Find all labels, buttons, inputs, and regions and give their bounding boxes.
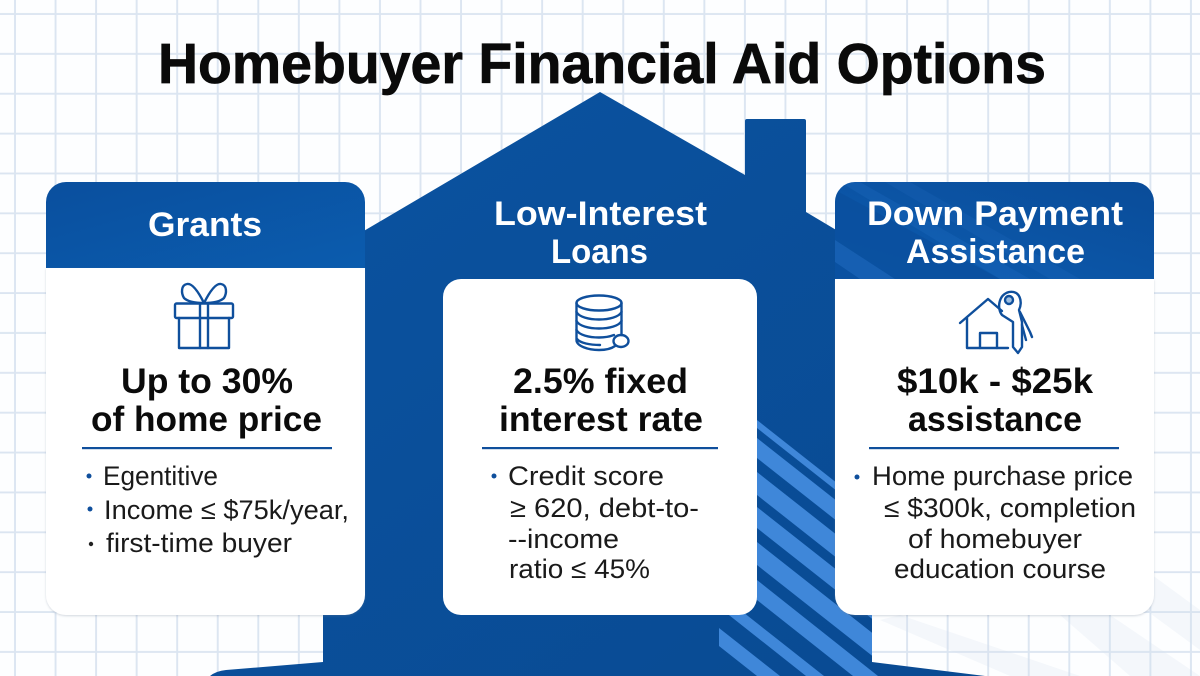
key figure: 2.5 percent fixed rate: interest rate bbox=[499, 400, 703, 439]
key figure: up to 30 percent bbox=[91, 362, 322, 439]
eligibility list: loans: ratio ≤ 45% bbox=[509, 554, 650, 584]
eligibility list: loans bbox=[492, 461, 699, 584]
key figure: up to 30 percent: Up to 30% bbox=[121, 362, 293, 401]
panel: down payment assistance bbox=[835, 182, 1154, 615]
key figure: 10k to 25k: assistance bbox=[908, 400, 1082, 439]
eligibility list: down payment bbox=[854, 461, 1136, 584]
key figure: 10k to 25k: $10k - $25k bbox=[897, 362, 1094, 401]
icon: coin stack bbox=[576, 296, 628, 350]
heading: grants: Grants bbox=[148, 206, 262, 244]
eligibility list: grants: first-time buyer bbox=[106, 528, 292, 558]
key figure: 10k to 25k bbox=[897, 362, 1094, 439]
eligibility list: down payment: of homebuyer bbox=[908, 524, 1082, 554]
heading: down payment assistance: Down Payment bbox=[867, 195, 1123, 233]
eligibility list: loans: --income bbox=[508, 524, 619, 554]
icon: gift box bbox=[175, 284, 233, 348]
eligibility list: loans: Credit score bbox=[508, 461, 664, 491]
heading: down payment assistance: Assistance bbox=[906, 233, 1085, 271]
panel: low-interest loans bbox=[443, 195, 757, 615]
eligibility list: grants bbox=[86, 461, 349, 558]
key figure: up to 30 percent: of home price bbox=[91, 400, 322, 439]
house silhouette background bbox=[210, 92, 985, 676]
panel: grants bbox=[46, 182, 365, 615]
heading: low-interest loans: Loans bbox=[551, 233, 648, 271]
key figure: 2.5 percent fixed rate bbox=[499, 362, 703, 439]
eligibility list: down payment: ≤ $300k, completion bbox=[884, 493, 1136, 523]
icon: house and keys bbox=[960, 292, 1032, 353]
eligibility list: down payment: Home purchase price bbox=[872, 461, 1133, 491]
eligibility list: loans: ≥ 620, debt-to- bbox=[510, 493, 699, 523]
key figure: 2.5 percent fixed rate: 2.5% fixed bbox=[513, 362, 688, 401]
heading: low-interest loans bbox=[494, 195, 707, 271]
heading: down payment assistance bbox=[867, 195, 1123, 271]
eligibility list: down payment: education course bbox=[894, 554, 1106, 584]
eligibility list: grants: Income ≤ $75k/year, bbox=[104, 495, 349, 525]
heading: low-interest loans: Low-Interest bbox=[494, 195, 707, 233]
title: Homebuyer Financial Aid Options bbox=[158, 32, 1046, 96]
eligibility list: grants: Egentitive bbox=[103, 461, 218, 491]
